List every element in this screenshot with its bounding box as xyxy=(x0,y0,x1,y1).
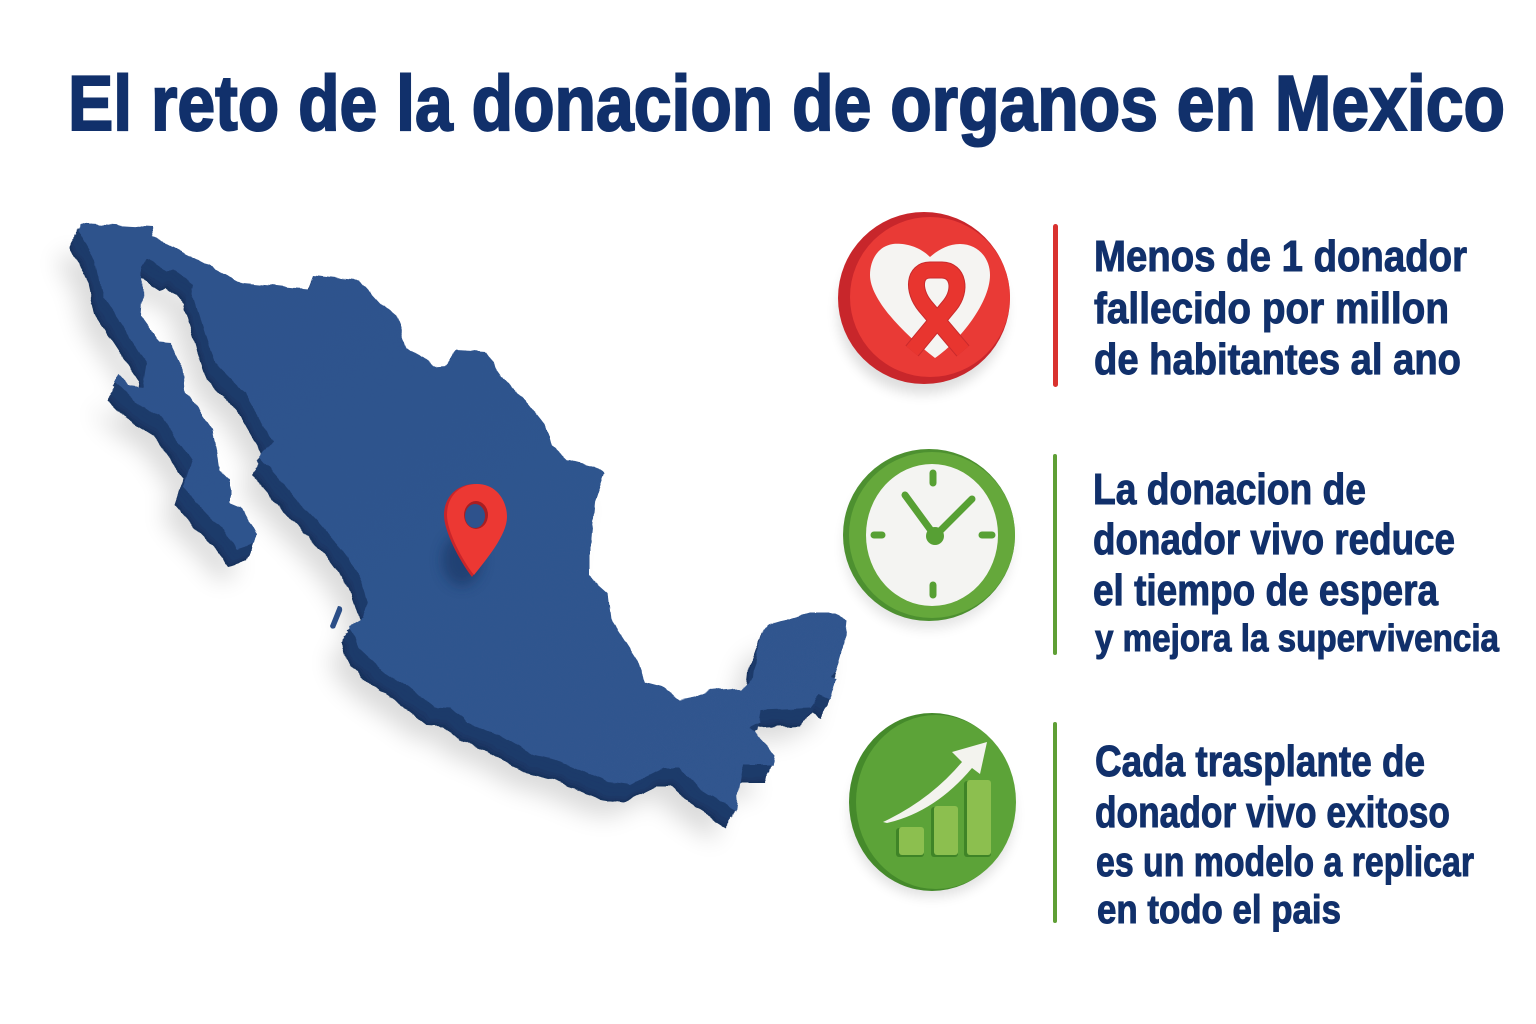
island xyxy=(330,606,342,629)
map pin xyxy=(442,484,507,586)
text: living donor benefit: donador vivo reduce xyxy=(1093,515,1455,564)
text: donor statistic: de habitantes al ano xyxy=(1094,335,1461,384)
divider: green xyxy=(1053,454,1057,655)
text: donor statistic: fallecido por millon xyxy=(1094,284,1449,333)
text: donor statistic: Menos de 1 donador xyxy=(1094,232,1467,281)
text: replicable model xyxy=(1095,737,1474,932)
icon: clock xyxy=(843,449,1015,629)
text: living donor benefit: el tiempo de espera xyxy=(1093,566,1438,615)
text: living donor benefit: La donacion de xyxy=(1093,465,1366,514)
divider: green lower xyxy=(1053,722,1057,923)
text: living donor benefit xyxy=(1093,465,1500,660)
icon: heart with ribbon xyxy=(838,212,1010,394)
icon: growth chart xyxy=(849,713,1016,897)
bars xyxy=(896,780,991,857)
text: donor statistic xyxy=(1094,232,1467,384)
arrow xyxy=(883,742,987,823)
map of Mexico xyxy=(58,223,847,842)
text: replicable model: donador vivo exitoso xyxy=(1095,788,1450,837)
text: replicable model: Cada trasplante de xyxy=(1095,737,1425,786)
divider: red xyxy=(1053,224,1058,387)
text: replicable model: en todo el pais xyxy=(1097,888,1341,932)
